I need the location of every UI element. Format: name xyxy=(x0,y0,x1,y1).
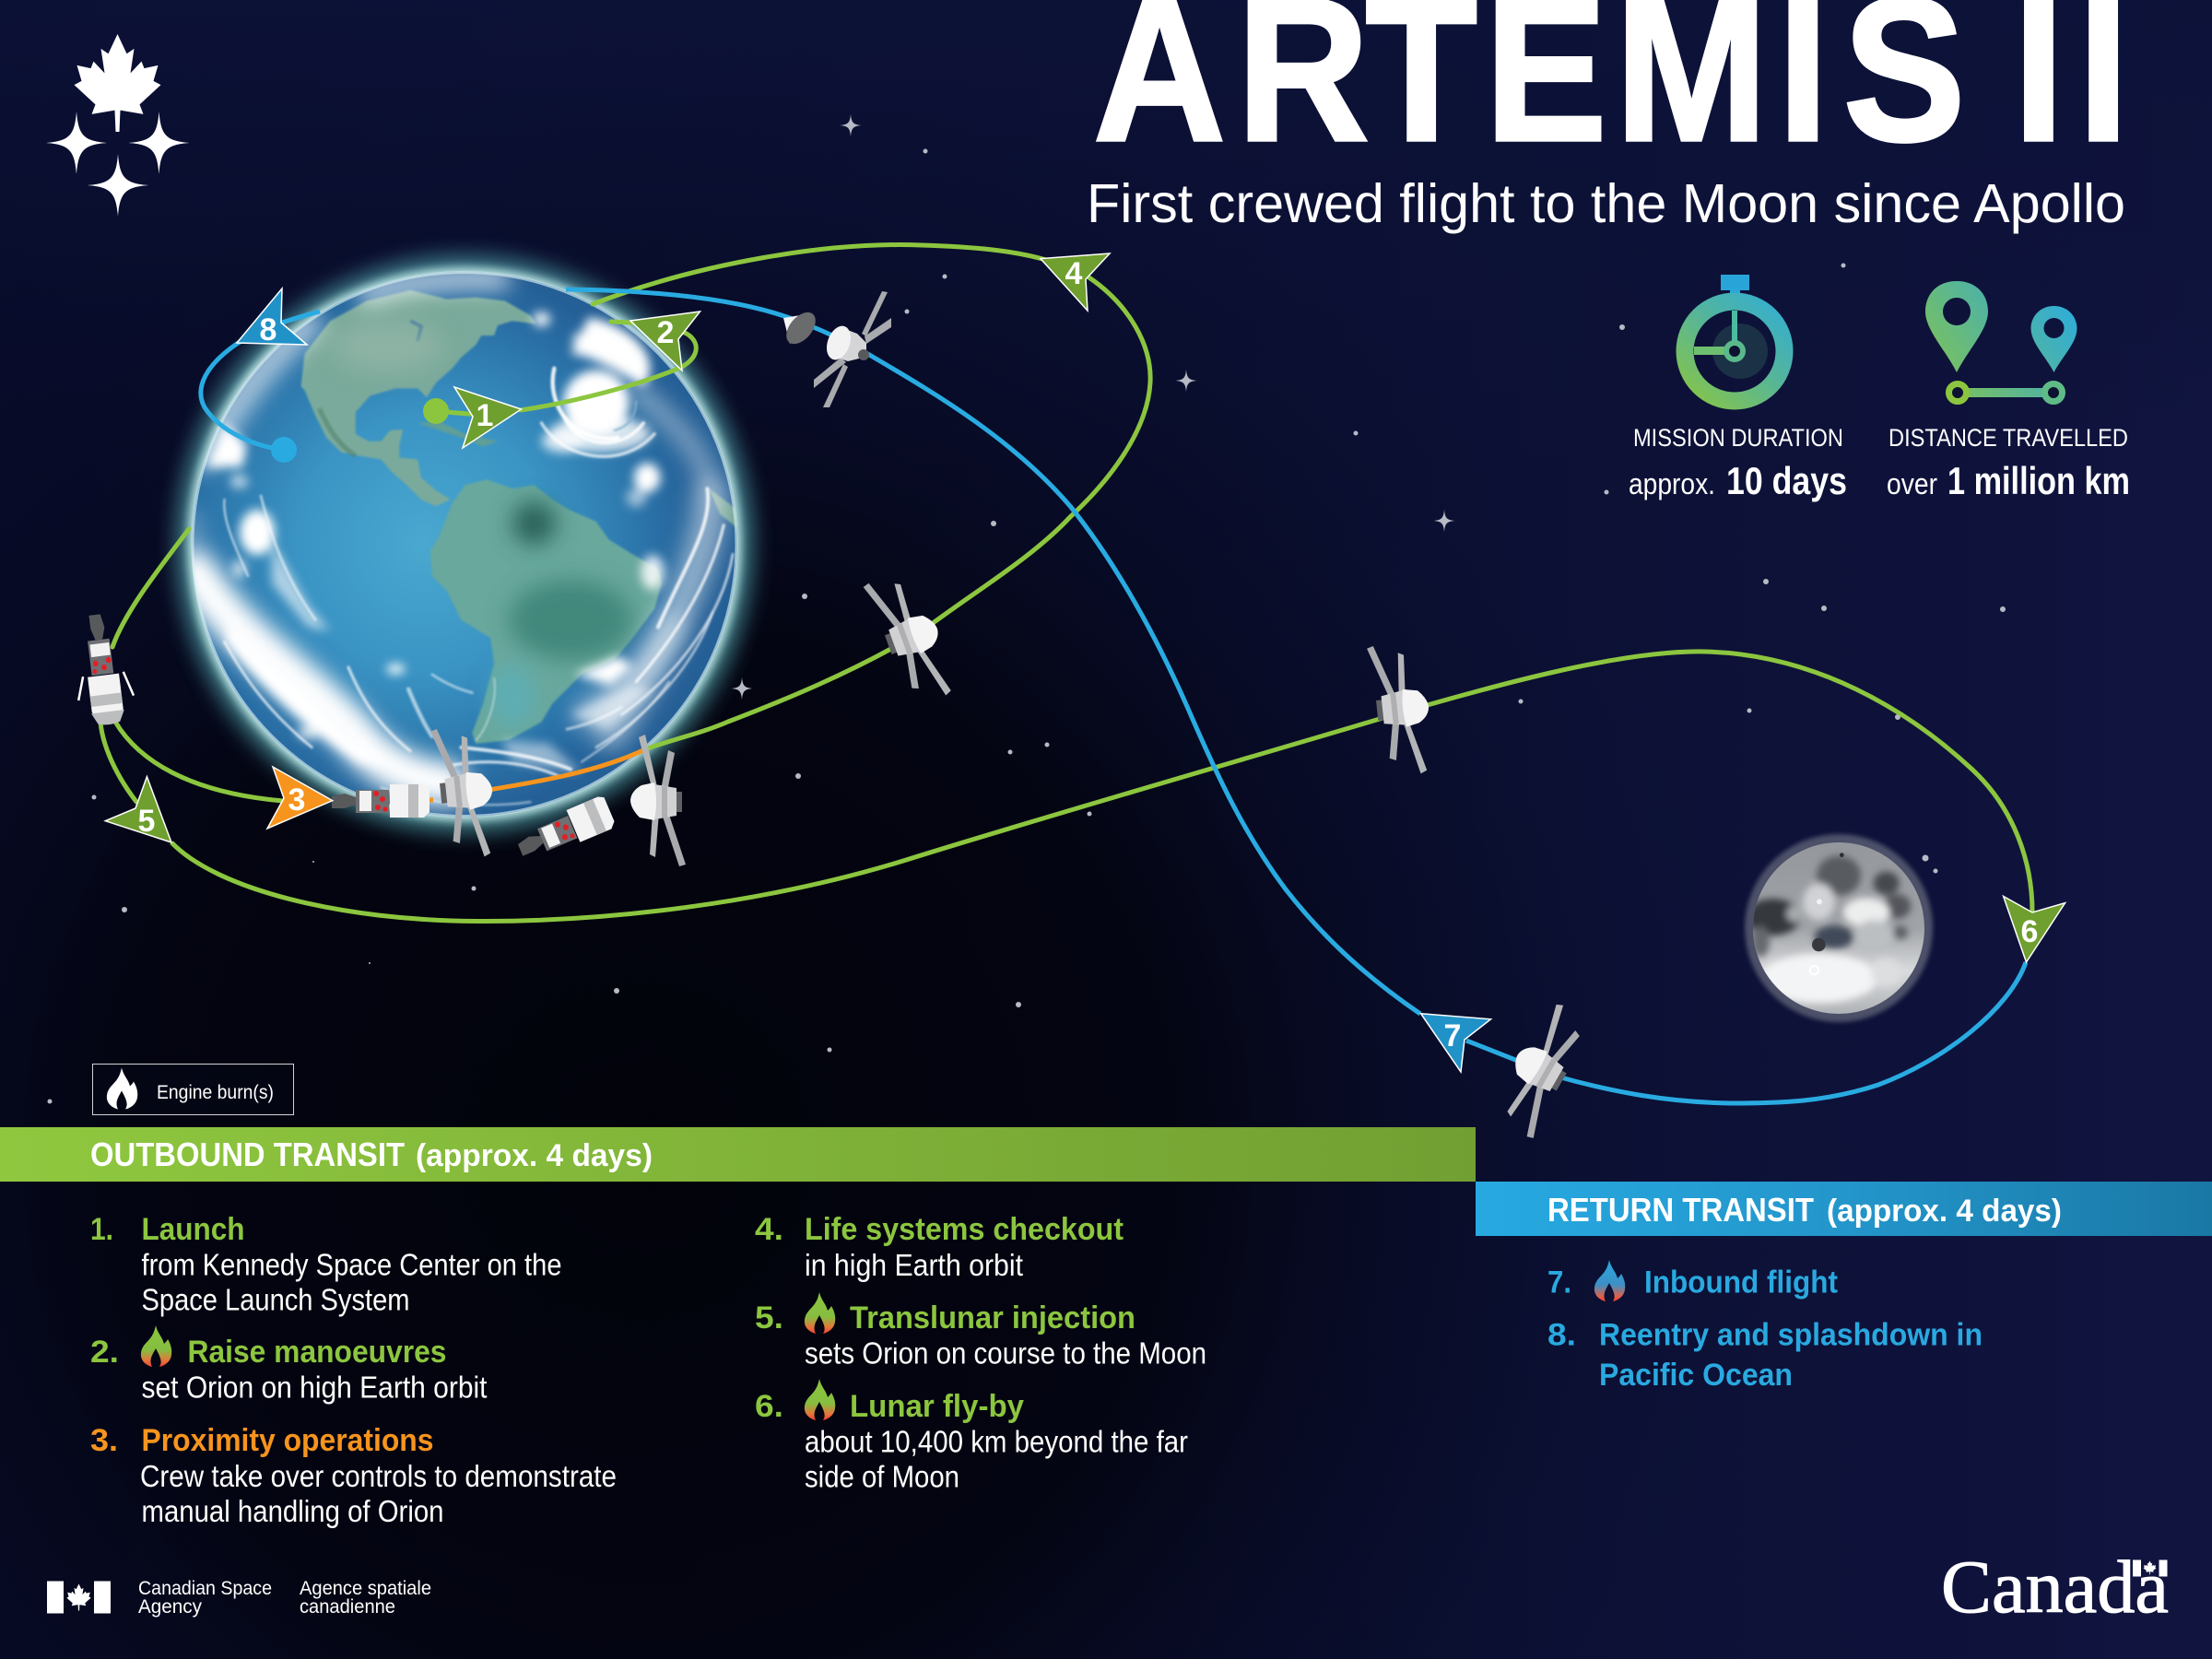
arrow marker 6 xyxy=(2004,896,2065,962)
legend: engine burn xyxy=(92,1064,293,1115)
spacecraft: Orion in high Earth orbit xyxy=(863,567,959,710)
star field xyxy=(48,114,2006,1103)
arrow marker 5: 5 xyxy=(138,804,155,839)
panel: return header bar: RETURN TRANSIT xyxy=(1547,1191,1814,1229)
step 5 xyxy=(755,1292,1206,1370)
logo: Canadian Space Agency signature: Agency xyxy=(138,1596,202,1618)
step 5: Translunar injection xyxy=(850,1300,1135,1335)
step 3 xyxy=(90,1423,617,1528)
step 4: Life systems checkout xyxy=(805,1212,1124,1247)
step 3: Proximity operations xyxy=(142,1423,433,1458)
panel: outbound header bar: (approx. 4 days) xyxy=(416,1138,653,1173)
legend: engine burn: Engine burn(s) xyxy=(157,1082,274,1103)
step 6: 6. xyxy=(755,1389,783,1424)
stat: mission duration: 10 days xyxy=(1726,459,1847,502)
orbit path: orange proximity operations xyxy=(406,749,645,800)
spacecraft: crew capsule xyxy=(781,307,821,349)
logo: Canadian Space Agency signature: Agence spatiale xyxy=(300,1578,431,1599)
step 3: 3. xyxy=(90,1423,118,1458)
arrow marker 1 xyxy=(454,387,522,448)
marker: splashdown site xyxy=(271,437,297,463)
arrow marker 3: 3 xyxy=(288,782,305,818)
arrow marker 8: 8 xyxy=(260,312,276,347)
moon xyxy=(1745,834,1933,1022)
step 2: set Orion on high Earth orbit xyxy=(142,1370,487,1405)
step 3: manual handling of Orion xyxy=(142,1494,444,1528)
spacecraft: launch upper stage xyxy=(68,611,136,728)
stat: mission duration xyxy=(1629,424,1847,502)
arrow marker 6: 6 xyxy=(2021,914,2038,949)
step 8: Reentry and splashdown in xyxy=(1599,1318,1983,1353)
subtitle: First crewed flight to the Moon since Apollo xyxy=(1087,173,2125,234)
step 6: Lunar fly-by xyxy=(850,1389,1024,1424)
orbit path: return to Earth xyxy=(201,289,2026,1103)
spacecraft: Orion during translunar injection xyxy=(1367,641,1435,778)
orbit path: high Earth orbit and proximity xyxy=(100,245,1150,802)
step 1: Space Launch System xyxy=(142,1283,409,1316)
spacecraft: Orion service module before reentry xyxy=(814,291,891,407)
arrow marker 8 xyxy=(237,288,307,347)
step 7: Inbound flight xyxy=(1644,1265,1838,1300)
step 8 xyxy=(1547,1318,1983,1393)
step 1: Launch xyxy=(142,1212,245,1247)
step 2: Raise manoeuvres xyxy=(188,1335,446,1370)
step 6: about 10,400 km beyond the far xyxy=(805,1425,1188,1458)
marker: launch site xyxy=(423,398,449,424)
stat: distance travelled xyxy=(1887,424,2130,502)
icon: stopwatch xyxy=(1685,275,1784,401)
arrow marker 2: 2 xyxy=(657,315,674,350)
earth xyxy=(175,254,754,833)
step 2: 2. xyxy=(90,1335,119,1370)
arrow marker 3 xyxy=(267,767,333,829)
stat: distance travelled: DISTANCE TRAVELLED xyxy=(1888,424,2128,452)
arrow marker 1: 1 xyxy=(477,398,493,433)
panel: outbound header bar: OUTBOUND TRANSIT xyxy=(90,1135,405,1173)
step 4 xyxy=(755,1212,1124,1282)
step 6 xyxy=(755,1379,1188,1493)
stat: mission duration: approx. xyxy=(1629,467,1715,500)
step 4: 4. xyxy=(755,1212,783,1247)
icon: distance pins xyxy=(1925,281,2077,402)
arrow marker 5 xyxy=(105,777,171,842)
orbit path: launch and raise manoeuvres xyxy=(435,322,696,415)
step 8: Pacific Ocean xyxy=(1599,1358,1793,1393)
step 5: 5. xyxy=(755,1300,783,1335)
panel: return header bar xyxy=(1476,1182,2212,1236)
icon: Canadian Space Agency maple leaf and stars xyxy=(46,34,190,217)
stat: mission duration: MISSION DURATION xyxy=(1633,424,1843,452)
spacecraft: Orion on inbound flight xyxy=(1485,998,1598,1140)
logo: Canadian Space Agency signature: canadienne xyxy=(300,1596,395,1618)
logo: Canadian Space Agency signature: Canadian Space xyxy=(138,1578,272,1599)
step 7: 7. xyxy=(1547,1265,1571,1300)
arrow marker 4: 4 xyxy=(1065,256,1083,291)
stat: distance travelled: 1 million km xyxy=(1947,459,2130,502)
spacecraft: Orion docked with stage xyxy=(332,724,499,861)
step 1 xyxy=(90,1212,562,1316)
step 8: 8. xyxy=(1547,1318,1576,1353)
stat: distance travelled: over xyxy=(1887,467,1937,500)
step 3: Crew take over controls to demonstrate xyxy=(140,1459,617,1493)
panel: return header bar: (approx. 4 days) xyxy=(1827,1194,2062,1229)
step 4: in high Earth orbit xyxy=(805,1248,1023,1282)
orbit path: translunar injection to the Moon xyxy=(171,652,2032,922)
arrow marker 4 xyxy=(1041,253,1110,311)
step 6: side of Moon xyxy=(805,1460,959,1493)
spacecraft: Orion separated from stage xyxy=(513,735,686,866)
arrow marker 7 xyxy=(1421,1014,1491,1072)
arrow marker 2 xyxy=(630,312,700,371)
step 2 xyxy=(90,1325,487,1405)
logo: Canadian Space Agency signature xyxy=(47,1578,431,1618)
step 5: sets Orion on course to the Moon xyxy=(805,1336,1206,1370)
panel: outbound header bar xyxy=(0,1127,1476,1182)
step 1: 1. xyxy=(90,1212,113,1247)
arrow marker 7: 7 xyxy=(1444,1018,1461,1053)
step 1: from Kennedy Space Center on the xyxy=(142,1248,562,1281)
logo: Canada wordmark: Canada xyxy=(1941,1545,2169,1629)
step 7 xyxy=(1547,1260,1838,1301)
